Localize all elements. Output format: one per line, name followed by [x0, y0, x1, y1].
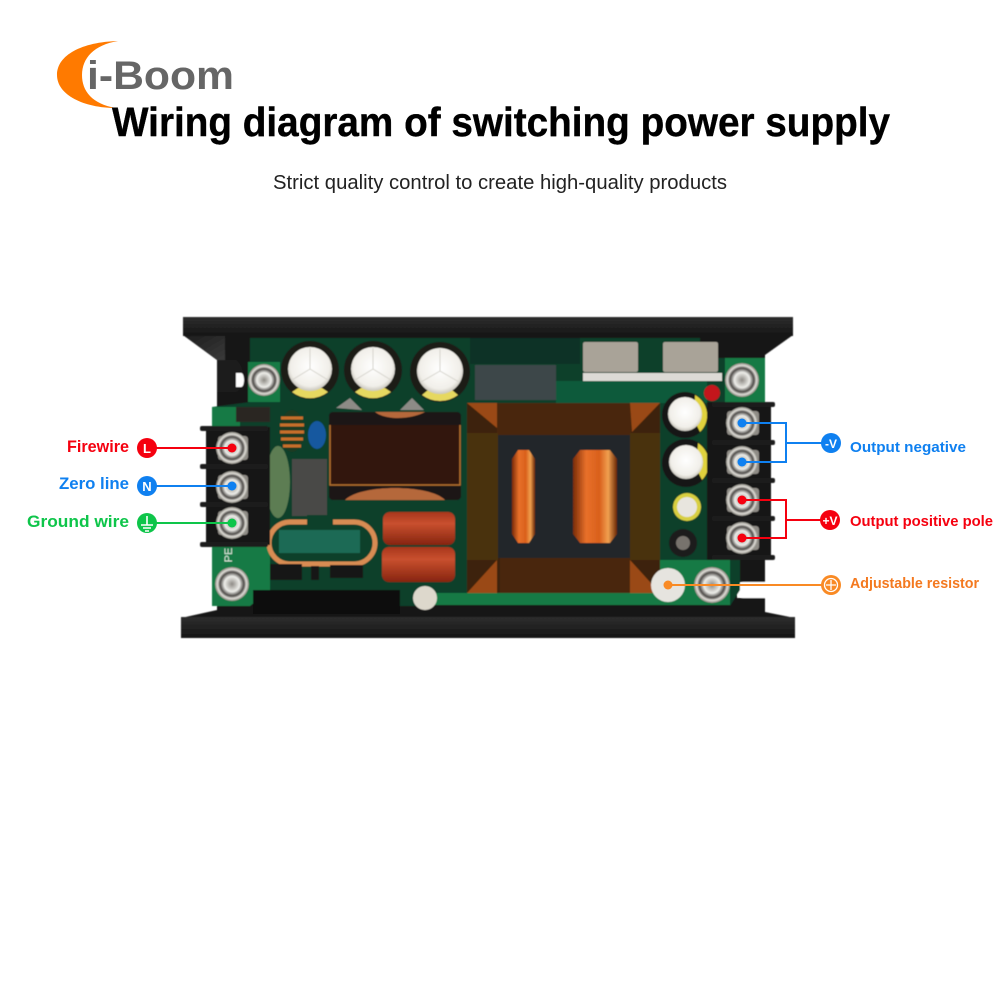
callout: Output positive pole: Output positive pole: [850, 513, 993, 530]
top grey components: [583, 342, 722, 381]
capacitor 1: [281, 341, 339, 399]
left terminal block: [200, 426, 270, 547]
callout: Output positive pole: [738, 496, 993, 542]
callout: Output negative: [738, 418, 966, 466]
subtitle: Strict quality control to create high-quality products: [273, 172, 727, 194]
mounting screws: [215, 363, 759, 603]
callout: Zero line: N: [142, 479, 152, 494]
callout: Firewire: Firewire: [67, 437, 129, 456]
capacitor 2: [344, 341, 402, 399]
left winding window: [512, 450, 535, 543]
callout: Adjustable resistor: [664, 575, 979, 595]
chassis fin notch: [217, 360, 243, 392]
right winding window: [573, 450, 617, 543]
bottom heatsink bar: [181, 617, 795, 638]
callout: Adjustable resistor: Adjustable resistor: [850, 575, 979, 592]
green varistor: [266, 446, 290, 518]
dark upper PCB strip: [470, 338, 580, 364]
output capacitors: [662, 392, 710, 557]
common mode choke: [329, 412, 461, 500]
logo: orange crescent: [57, 41, 118, 108]
small capacitor: [413, 586, 437, 610]
silver leads below capacitors: [336, 398, 424, 410]
mounting slot right: [736, 582, 765, 598]
lower right dark strip: [430, 605, 730, 614]
red LED: [704, 385, 720, 401]
callout: Output negative: Output negative: [850, 439, 966, 456]
red film capacitor 1: [383, 512, 455, 545]
silkscreen PE: PE: [223, 548, 235, 562]
toroid inductor: [280, 410, 304, 452]
board bright green areas: [212, 358, 765, 606]
chassis left fin face: [183, 335, 225, 360]
callout: Zero line: [59, 474, 236, 496]
grey relay: [475, 365, 556, 400]
callout: Ground wire: Ground wire: [27, 512, 129, 531]
main transformer: [467, 403, 660, 593]
callout: Output negative: -V: [825, 437, 837, 451]
callout: Zero line: Zero line: [59, 474, 129, 493]
small black fuse: [236, 407, 270, 422]
right terminal block: [707, 402, 775, 560]
callout: Firewire: L: [143, 441, 151, 456]
chassis body: [181, 335, 795, 618]
power supply board photo: [181, 317, 795, 638]
callout: Output positive pole: +V: [822, 514, 838, 528]
blue capacitor: [308, 421, 326, 449]
callout: Firewire: [67, 437, 236, 458]
logo: wordmark: i-Boom: [87, 54, 234, 98]
choke feet: [270, 564, 363, 580]
capacitor 3: [410, 342, 470, 402]
ring coil: [269, 515, 375, 564]
grey block: [292, 459, 327, 516]
circuit board: [212, 338, 765, 606]
callout: Ground wire: [27, 512, 236, 533]
red film capacitor 2: [382, 547, 455, 582]
adjustable resistor: [651, 568, 685, 602]
lower black strip: [253, 590, 400, 614]
title: Wiring diagram of switching power supply: [112, 99, 890, 145]
top heatsink bar: [183, 317, 793, 336]
logo: [57, 41, 234, 108]
mounting slot left: [236, 373, 244, 387]
board mid green right of relay: [556, 381, 707, 403]
